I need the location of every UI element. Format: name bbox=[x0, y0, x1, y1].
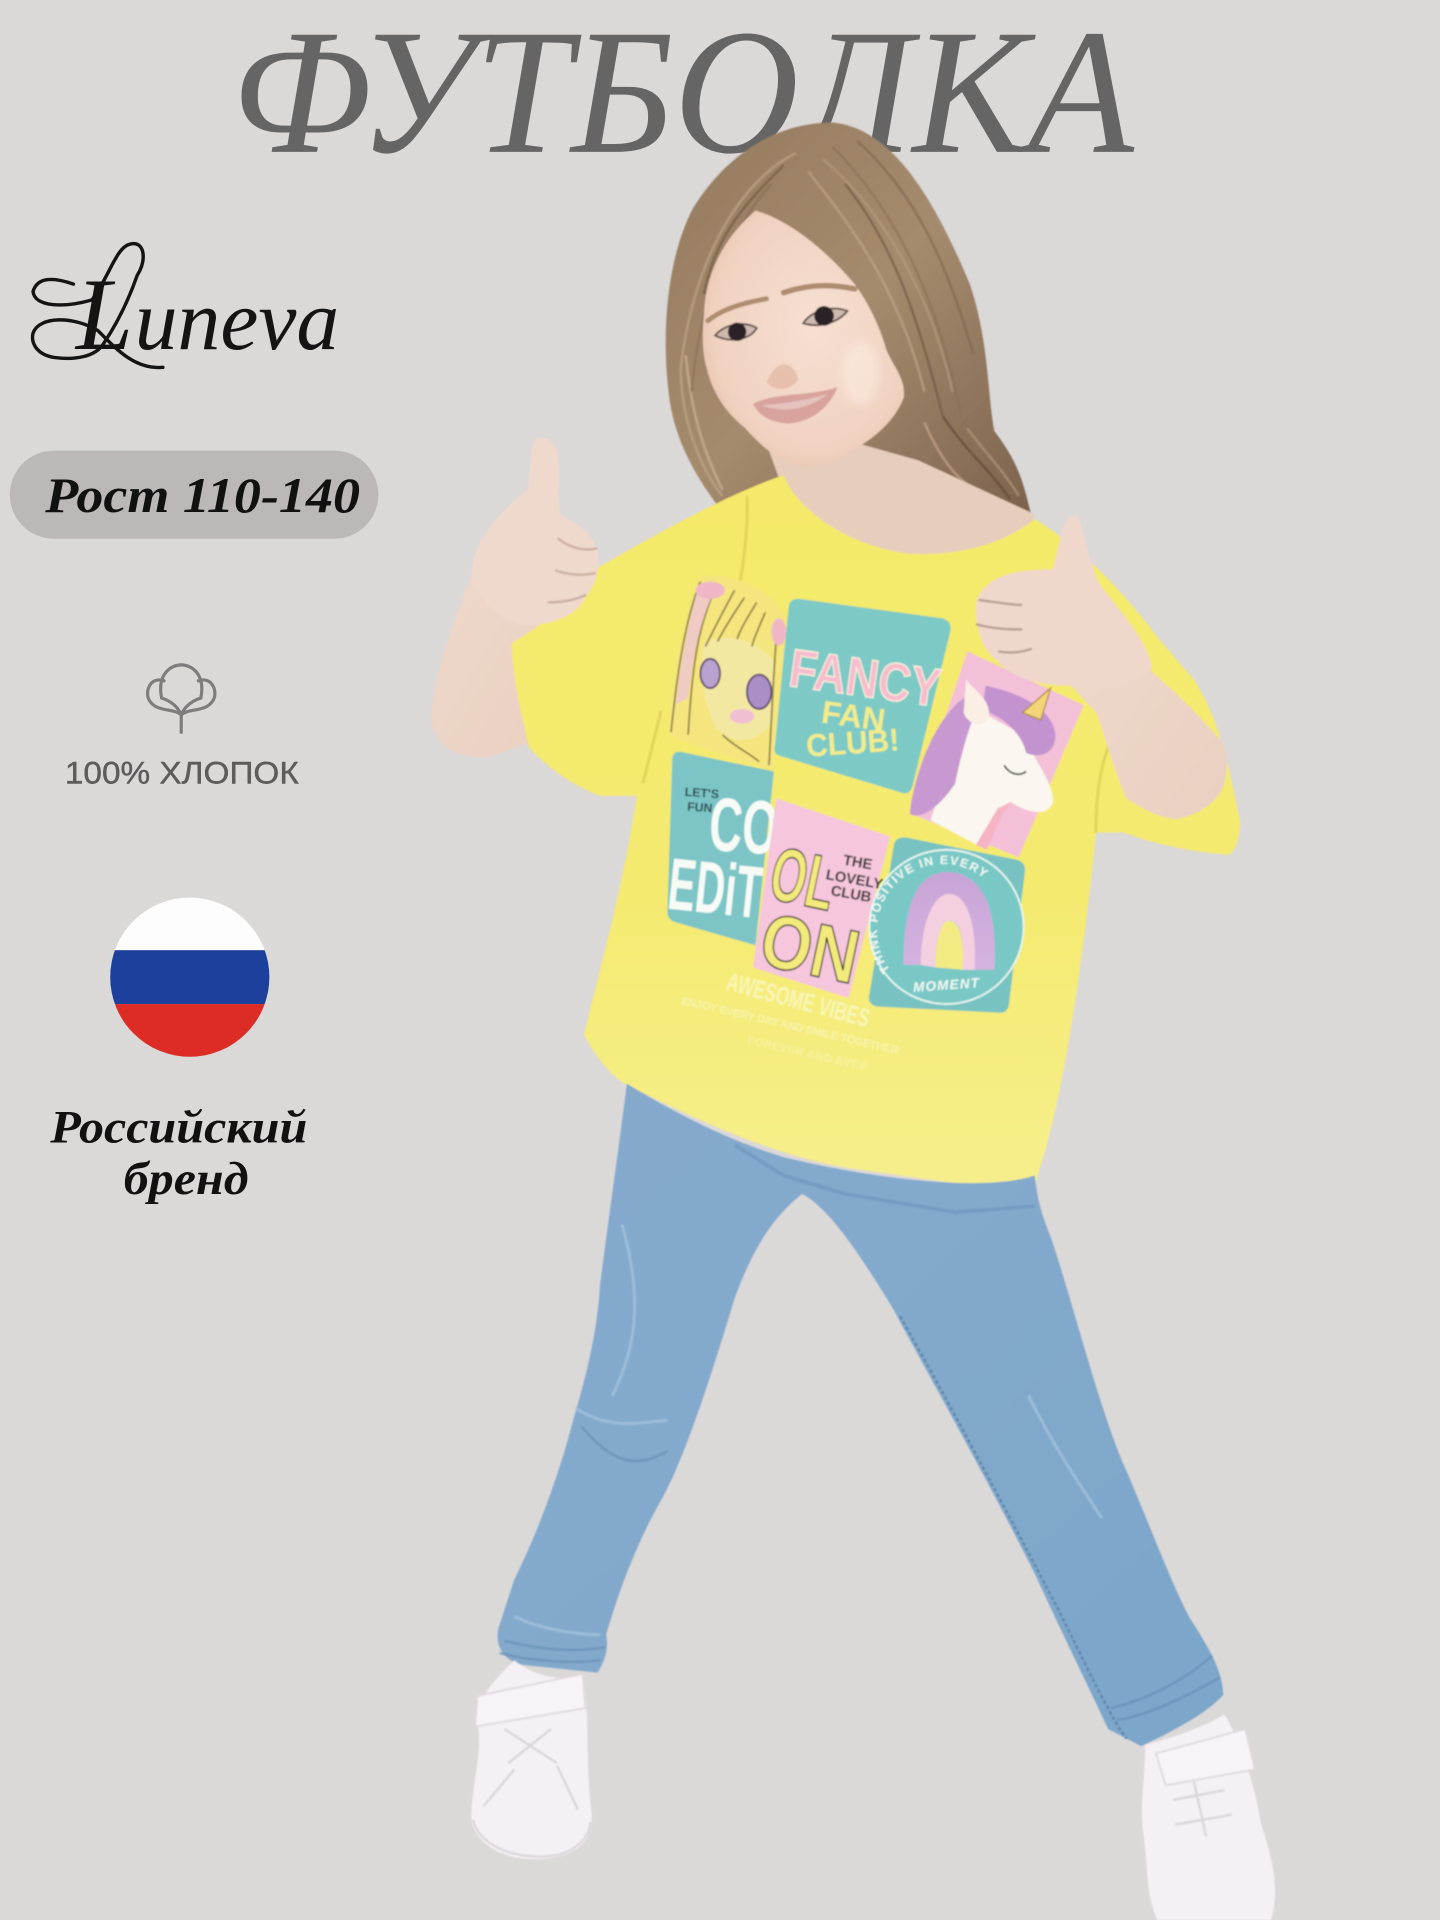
right shoe laces bbox=[1173, 1782, 1232, 1837]
fancy word: FANCY bbox=[786, 638, 944, 719]
neck and chest bbox=[769, 443, 1035, 576]
teal panel bbox=[869, 837, 1025, 1013]
brand logo: Luneva: L bbox=[76, 258, 133, 372]
left shoe upper bbox=[471, 1660, 592, 1859]
right finger creases bbox=[977, 600, 1031, 652]
edit word: EDiT bbox=[664, 842, 766, 934]
brand origin text: бренд bbox=[124, 1154, 249, 1205]
hair bbox=[666, 122, 1031, 514]
jeans right leg seam bbox=[900, 1316, 1127, 1739]
print: cool edition left bbox=[664, 752, 781, 945]
anime bow right bbox=[771, 618, 786, 645]
nose bbox=[767, 364, 798, 389]
shirt folds bbox=[643, 496, 1108, 833]
anime hair lines bbox=[671, 582, 778, 765]
badge text: Рост 110-140 bbox=[44, 467, 360, 523]
anime hair and face bbox=[669, 575, 790, 769]
unicorn horn bbox=[1022, 688, 1051, 720]
left arm bbox=[431, 551, 551, 757]
print: awesome vibes: AWESOME VIBES bbox=[723, 968, 873, 1033]
height badge bbox=[10, 451, 378, 539]
lovely club text bbox=[825, 853, 884, 906]
jeans waistband bbox=[735, 1145, 1035, 1212]
unicorn forelock bbox=[982, 686, 1056, 755]
moment text: MOMENT bbox=[913, 975, 981, 995]
lovely club text: THE bbox=[842, 853, 874, 874]
brand origin text: Российский bbox=[49, 1102, 307, 1153]
jeans body bbox=[498, 1084, 1223, 1746]
right eyebrow bbox=[784, 286, 855, 293]
left shoe bbox=[471, 1660, 592, 1859]
left hand palm bbox=[471, 438, 598, 625]
cheek highlight bbox=[842, 342, 879, 405]
face bbox=[703, 211, 904, 467]
left shoe laces bbox=[484, 1729, 578, 1810]
jeans left leg highlights bbox=[514, 1224, 1102, 1635]
icon: russian flag bbox=[110, 898, 270, 1057]
rainbow outer bbox=[904, 872, 995, 970]
lets fun: LET'S bbox=[684, 785, 719, 801]
cotton label: 100% ХЛОПОК bbox=[65, 755, 299, 791]
jeans right cuff bbox=[1111, 1656, 1220, 1720]
shirt bbox=[512, 475, 1240, 1186]
icon: cotton boll bbox=[148, 665, 215, 732]
girl figure bbox=[431, 122, 1276, 1920]
right arm bbox=[1071, 588, 1227, 819]
right hand bbox=[976, 516, 1152, 688]
left finger creases bbox=[549, 539, 596, 602]
jeans bbox=[498, 1084, 1223, 1746]
print: rainbow bbox=[868, 836, 1026, 1014]
anime eye right bbox=[747, 675, 771, 709]
lovely club text: CLUB bbox=[830, 883, 872, 906]
right eye bbox=[803, 306, 847, 326]
print: cool edition pink bbox=[753, 798, 890, 1001]
teal panel bbox=[774, 599, 951, 793]
lovely club text: LOVELY bbox=[825, 867, 884, 893]
right hand palm bbox=[976, 516, 1152, 688]
print: unicorn bbox=[910, 651, 1084, 857]
brand logo: Luneva bbox=[33, 244, 339, 372]
anime eye left bbox=[700, 659, 720, 688]
left eyebrow bbox=[708, 299, 767, 321]
ol word: OL bbox=[763, 831, 843, 927]
lets fun second line: FUN bbox=[687, 800, 713, 815]
left shoe sole bbox=[473, 1820, 590, 1857]
anime bow left bbox=[696, 582, 725, 599]
right shoe strap bbox=[1156, 1729, 1255, 1785]
unicorn neck pink shadow bbox=[976, 802, 1011, 850]
pink panel bbox=[753, 798, 890, 998]
unicorn eye bbox=[1004, 765, 1026, 774]
mouth bbox=[753, 387, 838, 424]
rainbow middle bbox=[921, 894, 975, 970]
print: anime girl bbox=[669, 575, 790, 769]
teal panel bbox=[667, 752, 774, 945]
right shoe upper bbox=[1142, 1714, 1275, 1920]
print: awesome vibes bbox=[680, 968, 900, 1074]
anime cheek bbox=[730, 709, 754, 724]
print: fancy fan club bbox=[774, 599, 951, 793]
left eye bbox=[715, 323, 757, 341]
brand origin text bbox=[49, 1102, 307, 1205]
print: awesome vibes: FOREVER AND EVER bbox=[746, 1034, 868, 1074]
badge pill bbox=[10, 451, 378, 539]
unicorn head bbox=[931, 704, 1053, 845]
left shoe strap bbox=[475, 1674, 585, 1727]
right shoe bbox=[1142, 1714, 1275, 1920]
anime face bbox=[702, 638, 774, 740]
print: awesome vibes: ENJOY EVERY DAY AND SMILE TOGETHER bbox=[680, 995, 900, 1057]
unicorn ear bbox=[964, 680, 989, 724]
left hand bbox=[471, 438, 598, 625]
fan word: FAN bbox=[819, 694, 887, 738]
jeans left knee creases bbox=[500, 1427, 667, 1662]
rainbow inner bbox=[936, 921, 963, 970]
badge ring bbox=[869, 850, 1024, 1004]
on word: ON bbox=[753, 897, 867, 1001]
co word: CO bbox=[707, 782, 781, 872]
face shape bbox=[703, 211, 904, 467]
club word: CLUB! bbox=[805, 721, 900, 764]
brand logo: Luneva: uneva bbox=[135, 273, 339, 368]
pink panel bbox=[912, 651, 1084, 857]
unicorn mane bbox=[910, 698, 973, 815]
rainbow circle text: THINK POSITIVE IN EVERY bbox=[868, 854, 989, 976]
anime pink hair strands bbox=[676, 588, 715, 704]
